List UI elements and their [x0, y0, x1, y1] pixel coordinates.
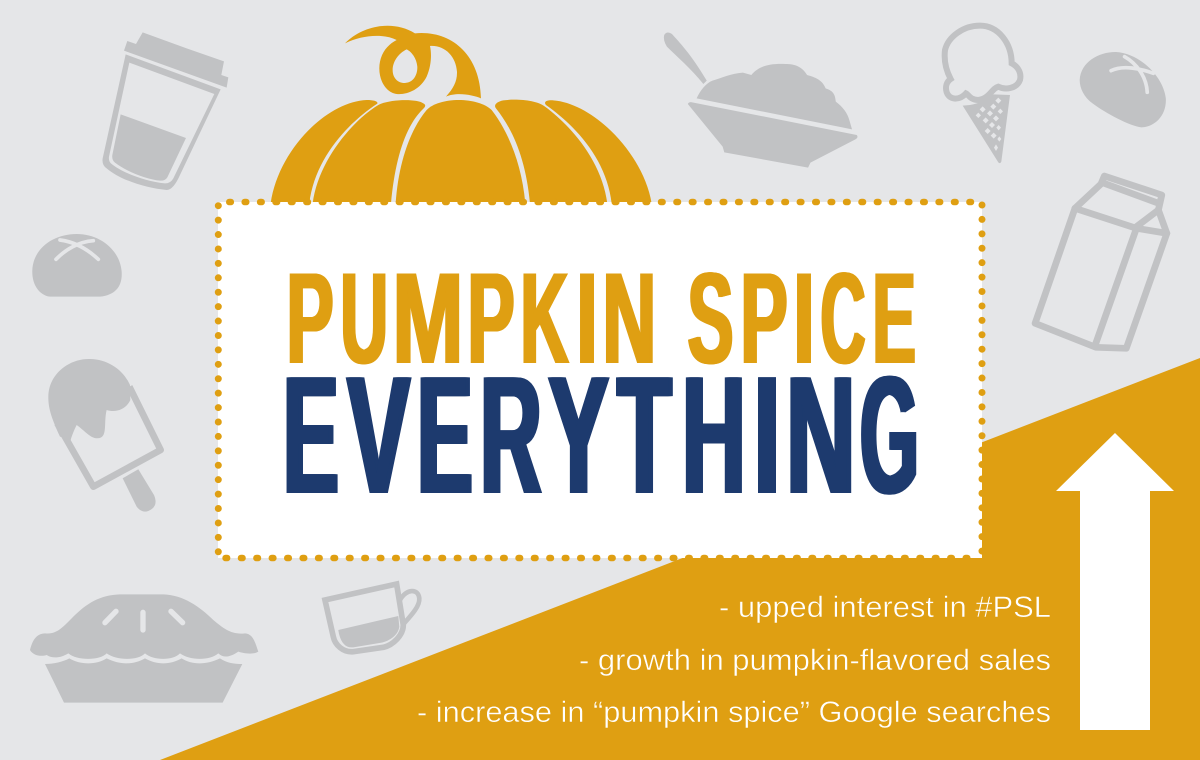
- text: I: [574, 245, 600, 391]
- text: G: [858, 340, 916, 528]
- bullet list: [417, 591, 1051, 729]
- text: E: [281, 340, 337, 528]
- text: Y: [546, 340, 607, 528]
- text: N: [601, 245, 655, 391]
- text: E: [871, 245, 914, 391]
- text: E: [415, 340, 471, 528]
- text: P: [285, 245, 332, 391]
- title: everything: [281, 340, 916, 528]
- text: R: [478, 340, 539, 528]
- text: K: [519, 245, 567, 391]
- icon: milk carton: [1035, 176, 1167, 348]
- title: pumpkin spice: [285, 245, 915, 391]
- icon: ice cream cone: [945, 26, 1020, 163]
- text: I: [750, 340, 784, 528]
- text: I: [791, 245, 817, 391]
- icon: bowl of food: [664, 33, 857, 168]
- text: M: [391, 245, 462, 391]
- text: H: [680, 340, 743, 528]
- icon: mug: [325, 584, 419, 652]
- icon: coffee cup: [102, 32, 228, 190]
- text: V: [345, 340, 408, 528]
- text: N: [784, 340, 853, 528]
- icon: popsicle: [48, 359, 161, 512]
- text: P: [466, 245, 513, 391]
- icon: bread roll left: [32, 234, 122, 297]
- text: U: [339, 245, 386, 391]
- text: C: [819, 245, 864, 391]
- title card: [218, 202, 982, 558]
- white up arrow: [1056, 433, 1174, 730]
- bullet: sales growth: - growth in pumpkin-flavored sales: [579, 644, 1051, 677]
- text: P: [739, 245, 786, 391]
- text: S: [686, 245, 732, 391]
- icon: bread roll right: [1080, 52, 1166, 127]
- icon: pumpkin: [271, 26, 652, 203]
- bullet: PSL interest: - upped interest in #PSL: [719, 591, 1051, 624]
- icon: pie: [30, 594, 258, 703]
- orange diagonal panel: [160, 358, 1200, 760]
- bullet: Google searches: - increase in “pumpkin spice” Google searches: [417, 696, 1051, 729]
- text: T: [615, 340, 669, 528]
